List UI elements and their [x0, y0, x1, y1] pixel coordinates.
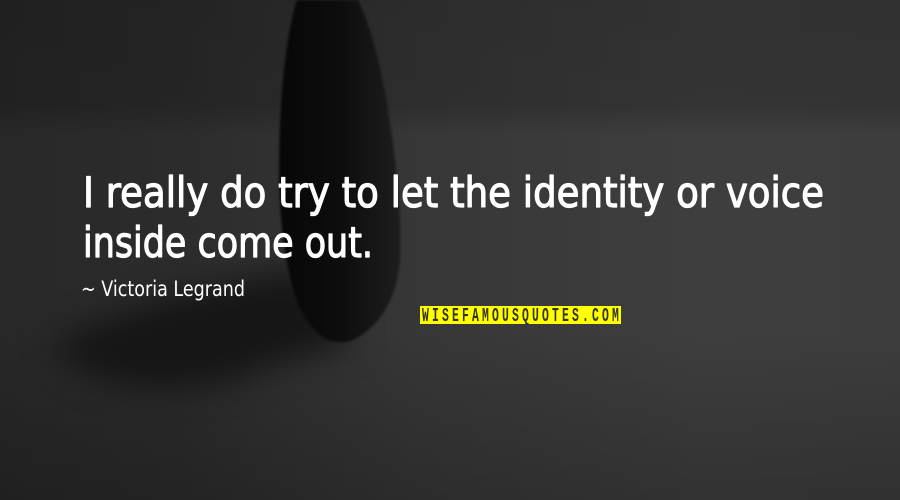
author: ~ Victoria Legrand	[81, 277, 245, 301]
quote text: inside come out.	[83, 218, 373, 267]
quote text: I really do try to let the identity or voice	[83, 168, 824, 217]
quote text	[83, 168, 824, 267]
watermark badge: WISEFAMOUSQUOTES.COM	[422, 305, 619, 327]
